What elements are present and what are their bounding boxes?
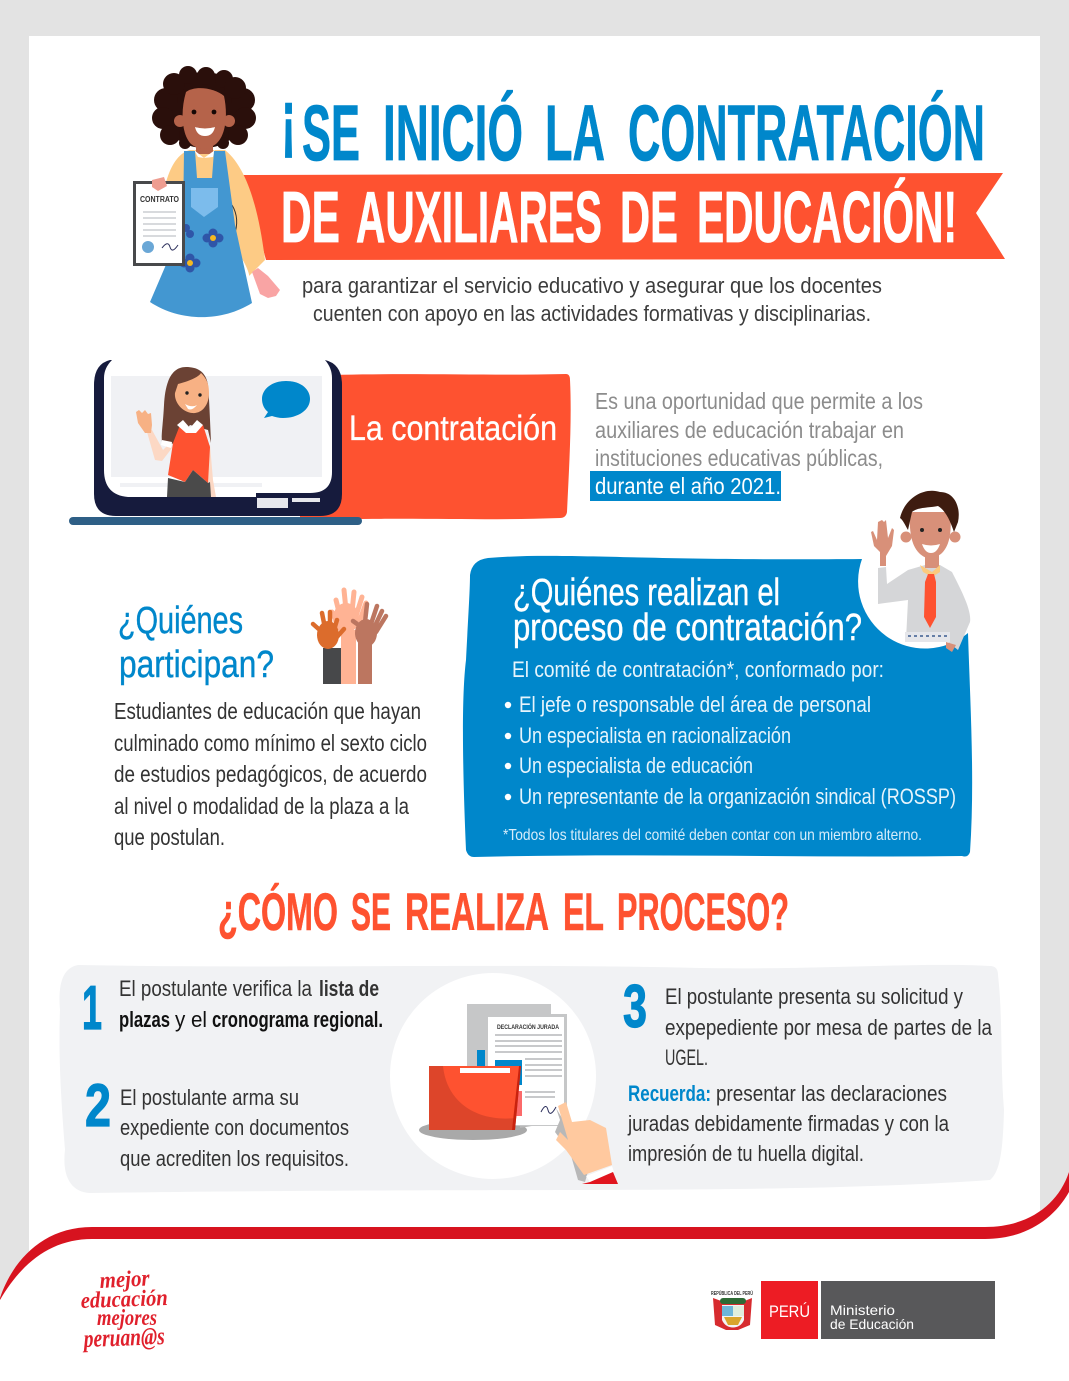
step 1: 1 (82, 974, 102, 1043)
logo: Ministerio de Educación (821, 1281, 995, 1339)
panel heading: ¿Quiénes realizan el (513, 572, 780, 614)
panel body list: Un especialista de educación (519, 753, 753, 778)
step 3: expepediente por mesa de partes de la (665, 1015, 992, 1040)
footnote: *Todos los titulares del comité deben contar con un miembro alterno. (503, 827, 922, 844)
panel: pasos del proceso (59, 965, 1004, 1193)
panel: quiénes realizan (463, 556, 972, 857)
illustration: laptop with teacher (69, 360, 362, 525)
subtitle text (302, 273, 882, 326)
logo: PERÚ (761, 1281, 818, 1339)
reminder (627, 1081, 949, 1166)
step 2: El postulante arma su (120, 1085, 299, 1110)
text block: participan (114, 698, 427, 850)
icon: raised hands (313, 590, 386, 684)
text block: oportunidad: auxiliares de educación trabajar en (595, 417, 904, 443)
panel body list: El comité de contratación*, conformado por: (512, 657, 884, 682)
raised hand (871, 520, 894, 566)
step 3 (623, 973, 992, 1070)
red ribbon with heading line two (243, 173, 1005, 260)
logo: escudo del Perú: REPÚBLICA DEL PERÚ (711, 1290, 753, 1297)
logo: PERÚ: PERÚ (769, 1302, 810, 1321)
panel body list: El jefe o responsable del área de personal (519, 692, 871, 717)
face (174, 115, 186, 127)
heading line one: ¡ (281, 73, 296, 162)
footer band with red curve (0, 1172, 1069, 1381)
subtitle text: para garantizar el servicio educativo y asegurar que los docentes (302, 273, 882, 298)
reminder: impresión de tu huella digital. (628, 1141, 864, 1166)
heading line one: INICIÓ (383, 88, 523, 177)
text block: participan: Estudiantes de educación que hayan (114, 698, 421, 724)
heading: cómo se realiza el proceso (218, 882, 789, 942)
text block: participan: culminado como mínimo el sexto ciclo (114, 730, 427, 756)
reminder: presentar las declaraciones (716, 1081, 947, 1106)
contract (133, 181, 185, 266)
red block: La contratación: La contratación (349, 409, 557, 448)
panel heading (513, 572, 862, 649)
step 3: El postulante presenta su solicitud y (665, 984, 964, 1009)
step 1: El postulante verifica lalista de (119, 976, 379, 1001)
heading: cómo se realiza el proceso: ¿CÓMO (218, 882, 338, 942)
heading: Quiénes participan: ¿Quiénes (118, 600, 243, 642)
text block: participan: de estudios pedagógicos, de acuerdo (114, 761, 427, 787)
logo: mejor educación mejores peruan@s: educación (80, 1285, 168, 1313)
heading line one (281, 73, 985, 177)
hair (152, 66, 256, 149)
heading line one: SE (302, 88, 360, 177)
heading: cómo se realiza el proceso: EL (563, 883, 604, 942)
illustration: woman holding contract: CONTRATO (140, 195, 179, 204)
text block: oportunidad: Es una oportunidad que permite a los (595, 388, 923, 414)
yellow blouse (160, 150, 265, 276)
panel body list (505, 657, 956, 809)
reminder: Recuerda: (628, 1081, 711, 1106)
heading: cómo se realiza el proceso: SE (351, 883, 391, 942)
text block: oportunidad: instituciones educativas públicas, (595, 445, 883, 471)
logo: Ministerio de Educación: Ministerio (830, 1302, 895, 1318)
logo: mejor educación mejores peruan@s: peruan@s (82, 1323, 165, 1353)
heading: cómo se realiza el proceso: PROCESO? (617, 883, 789, 942)
illustration: documents circle (390, 973, 618, 1184)
logo: mejor educación mejores peruan@s (80, 1265, 168, 1353)
reminder: juradas debidamente firmadas y con la (627, 1111, 949, 1136)
heading: cómo se realiza el proceso: REALIZA (405, 883, 549, 942)
heading: Quiénes participan: participan? (119, 644, 274, 686)
text block: participan: al nivel o modalidad de la plaza a la (114, 793, 409, 819)
step 3: UGEL. (665, 1045, 708, 1070)
text block: oportunidad (595, 388, 923, 471)
heading line one: LA (545, 88, 605, 177)
red block: La contratación (300, 374, 571, 520)
logo: Ministerio de Educación: de Educación (830, 1316, 914, 1332)
step 3: 3 (623, 973, 647, 1040)
step 2: que acrediten los requisitos. (120, 1146, 349, 1171)
logo: escudo del Perú (711, 1290, 753, 1330)
subtitle text: cuenten con apoyo en las actividades formativas y disciplinarias. (313, 301, 871, 326)
neck and collar (196, 140, 213, 154)
step 1: plazasy elcronograma regional. (119, 1007, 383, 1032)
logo: mejor educación mejores peruan@s: mejor (99, 1265, 151, 1293)
step 2 (85, 1072, 349, 1171)
illustration: man waving (871, 491, 970, 652)
teacher (162, 367, 211, 444)
step 1 (82, 974, 383, 1043)
panel heading: proceso de contratación? (513, 607, 862, 649)
speech bubble (262, 381, 310, 418)
step 2: expediente con documentos (120, 1115, 349, 1140)
logo: mejor educación mejores peruan@s: mejores (97, 1305, 157, 1330)
text block: participan: que postulan. (114, 824, 225, 850)
red ribbon with heading line two: DE (620, 178, 678, 258)
apron (150, 151, 252, 317)
step 2: 2 (85, 1072, 111, 1139)
shirt (878, 565, 970, 650)
highlight: durante el año 2021: durante el año 2021. (595, 473, 781, 499)
heading: Quiénes participan (118, 600, 274, 686)
panel body list: Un representante de la organización sindical (ROSSP) (519, 784, 956, 809)
illustration: woman holding contract (133, 66, 280, 317)
illustration: documents circle: DECLARACIÓN JURADA (497, 1022, 559, 1031)
flowers (180, 224, 224, 272)
red ribbon with heading line two: DE (281, 178, 340, 258)
panel body list: Un especialista en racionalización (519, 723, 791, 748)
red ribbon with heading line two: AUXILIARES (356, 178, 602, 258)
